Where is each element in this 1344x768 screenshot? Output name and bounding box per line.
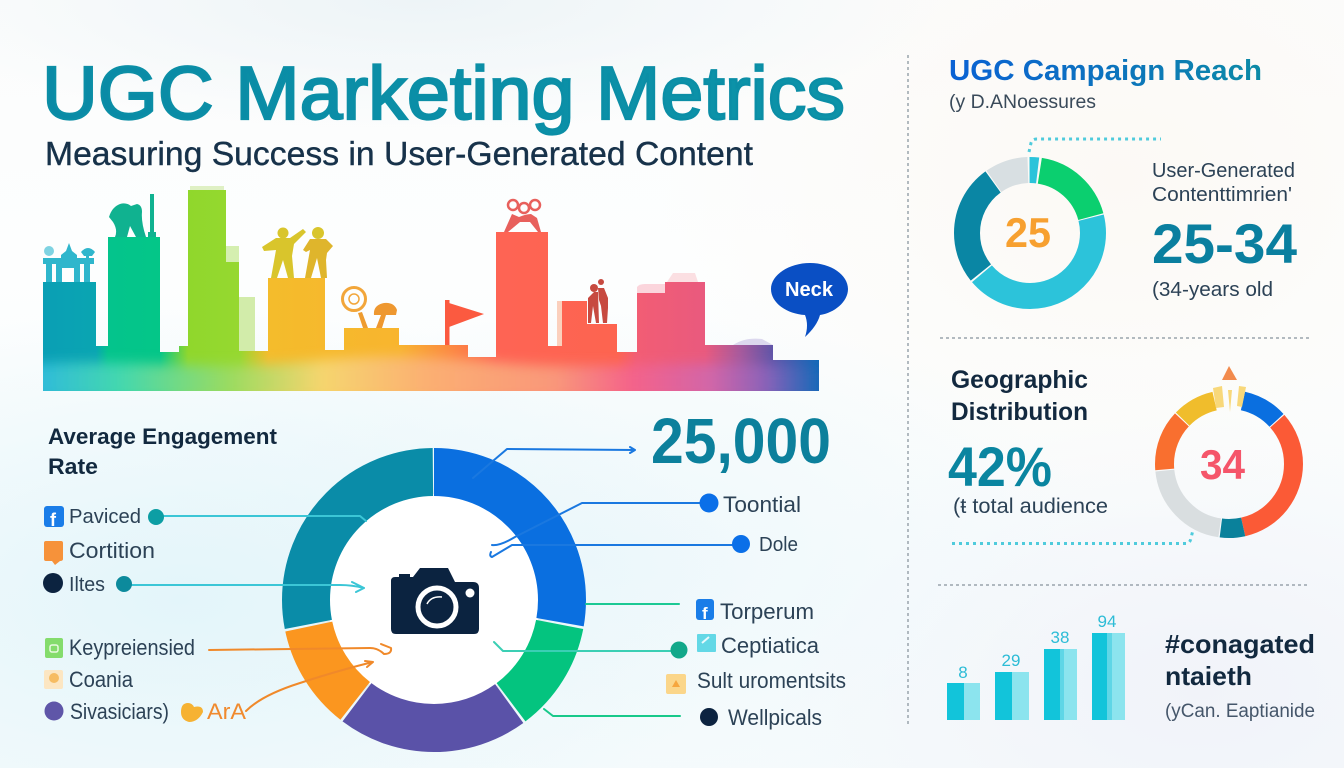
- label: Ceptiatica: Ceptiatica: [721, 633, 820, 658]
- dot: purple: [44, 702, 64, 720]
- subheading: (y D.ANoessures: [949, 92, 1096, 113]
- donut chart: engagement: [306, 472, 562, 728]
- dot: dark: [700, 708, 718, 726]
- icon: yellow dancing figures: [262, 227, 333, 278]
- connector: Dole: [490, 535, 750, 557]
- heading: Geographic: [951, 366, 1088, 394]
- icon: orange badge: [44, 541, 63, 565]
- donut chart: geography: 34: [1200, 441, 1246, 488]
- heading: ntaieth: [1165, 661, 1252, 691]
- big number: 25-34: 25-34: [1152, 212, 1297, 275]
- dotted connector: [1029, 139, 1161, 152]
- label: Cortition: Cortition: [69, 538, 155, 563]
- skyline bar illustration: [30, 186, 830, 400]
- icon: red group on tower: [504, 200, 541, 232]
- donut chart: age: [967, 170, 1093, 296]
- big number: 25,000: 25,000: [651, 405, 831, 477]
- heading: [951, 366, 1088, 426]
- bar chart: 94: [1098, 612, 1116, 631]
- label: Dole: Dole: [759, 534, 798, 556]
- heading: UGC Campaign Reach: [949, 55, 1262, 87]
- speech bubble: [771, 263, 848, 337]
- icon: orange heart: [181, 703, 203, 722]
- heading: Rate: [48, 454, 98, 479]
- icon: green figures and pole: [109, 194, 156, 237]
- label: Paviced: Paviced: [69, 506, 141, 528]
- text block: user-generated content: User-Generated: [1152, 160, 1295, 182]
- donut chart: age: 25: [1005, 209, 1051, 256]
- label: Coania: Coania: [69, 667, 134, 692]
- heading: Distribution: [951, 398, 1088, 426]
- caption: years old: (34-years old: [1152, 279, 1273, 301]
- donut chart: geography: [1164, 400, 1294, 528]
- text block: user-generated content: [1152, 160, 1295, 206]
- connector: ArA: [246, 661, 373, 711]
- icon: green badge: [45, 638, 63, 658]
- label: Toontial: Toontial: [723, 492, 801, 517]
- label: Torperum: Torperum: [720, 599, 814, 624]
- label: ArA: ArA: [207, 699, 246, 724]
- icon: palace silhouette: [43, 243, 95, 282]
- icon: facebook: [696, 599, 714, 623]
- big number: 42%: 42%: [948, 435, 1052, 498]
- icon: pale orange badge: [44, 670, 63, 689]
- icon: pale yellow burst: [1213, 386, 1246, 412]
- connector: Iltes: [116, 576, 364, 592]
- caption: (yCan. Eaptianide: [1165, 701, 1315, 722]
- icon: couple silhouette: [588, 279, 608, 323]
- icon: pale orange badge: [666, 674, 686, 694]
- panel: geographic distribution: [948, 366, 1294, 544]
- panel: average engagement rate: [43, 405, 846, 730]
- legend: left group: [43, 506, 391, 724]
- subtitle: Measuring Success in User-Generated Content: [45, 135, 753, 172]
- text block: user-generated content: Contenttimrien': [1152, 184, 1292, 206]
- big number: 25,000: [473, 405, 831, 478]
- connector: Paviced: [148, 509, 366, 525]
- icon: facebook: [44, 506, 64, 530]
- label: Keypreiensied: Keypreiensied: [69, 635, 195, 660]
- heading: Average Engagement: [48, 424, 278, 449]
- dotted connector: [952, 530, 1193, 544]
- connector: 25,000: [473, 447, 635, 478]
- icon: magnifier and plant: [342, 288, 397, 328]
- connector: Wellpicals: [544, 709, 680, 716]
- connector: Toontial: [492, 494, 718, 545]
- bar chart: [947, 612, 1125, 720]
- bar chart: 38: [1051, 628, 1069, 647]
- heading: [1165, 629, 1315, 691]
- connector: Ceptiatica: [494, 642, 688, 658]
- speech bubble: Neck: [785, 279, 834, 301]
- caption: total audience: (ŧ total audience: [953, 495, 1108, 518]
- bar chart: 8: [958, 663, 968, 682]
- panel: hashtag performance: [947, 612, 1315, 722]
- icon: flag: [445, 300, 484, 345]
- label: Sivasiciars: Sivasiciars): [70, 699, 169, 724]
- bar chart: 29: [1002, 651, 1020, 670]
- icon: warning triangle: [1222, 366, 1237, 380]
- panel: UGC campaign reach: [949, 55, 1297, 301]
- label: Sult uromentsits: Sult uromentsits: [697, 668, 846, 693]
- icon: camera: [391, 568, 479, 634]
- connector: Torperum: [586, 603, 679, 605]
- dot: dark: [43, 573, 63, 593]
- title: UGC Marketing Metrics: [42, 51, 845, 135]
- icon: teal badge: [697, 634, 716, 652]
- label: Wellpicals: Wellpicals: [728, 705, 822, 730]
- label: Iltes: Iltes: [69, 574, 105, 596]
- icon: facebook: f: [702, 604, 708, 623]
- heading: [48, 424, 278, 479]
- legend: right group: [490, 492, 846, 730]
- connector: Keypreiensied: [209, 644, 391, 654]
- icon: facebook: f: [50, 510, 57, 530]
- heading: #conagated: [1165, 629, 1315, 659]
